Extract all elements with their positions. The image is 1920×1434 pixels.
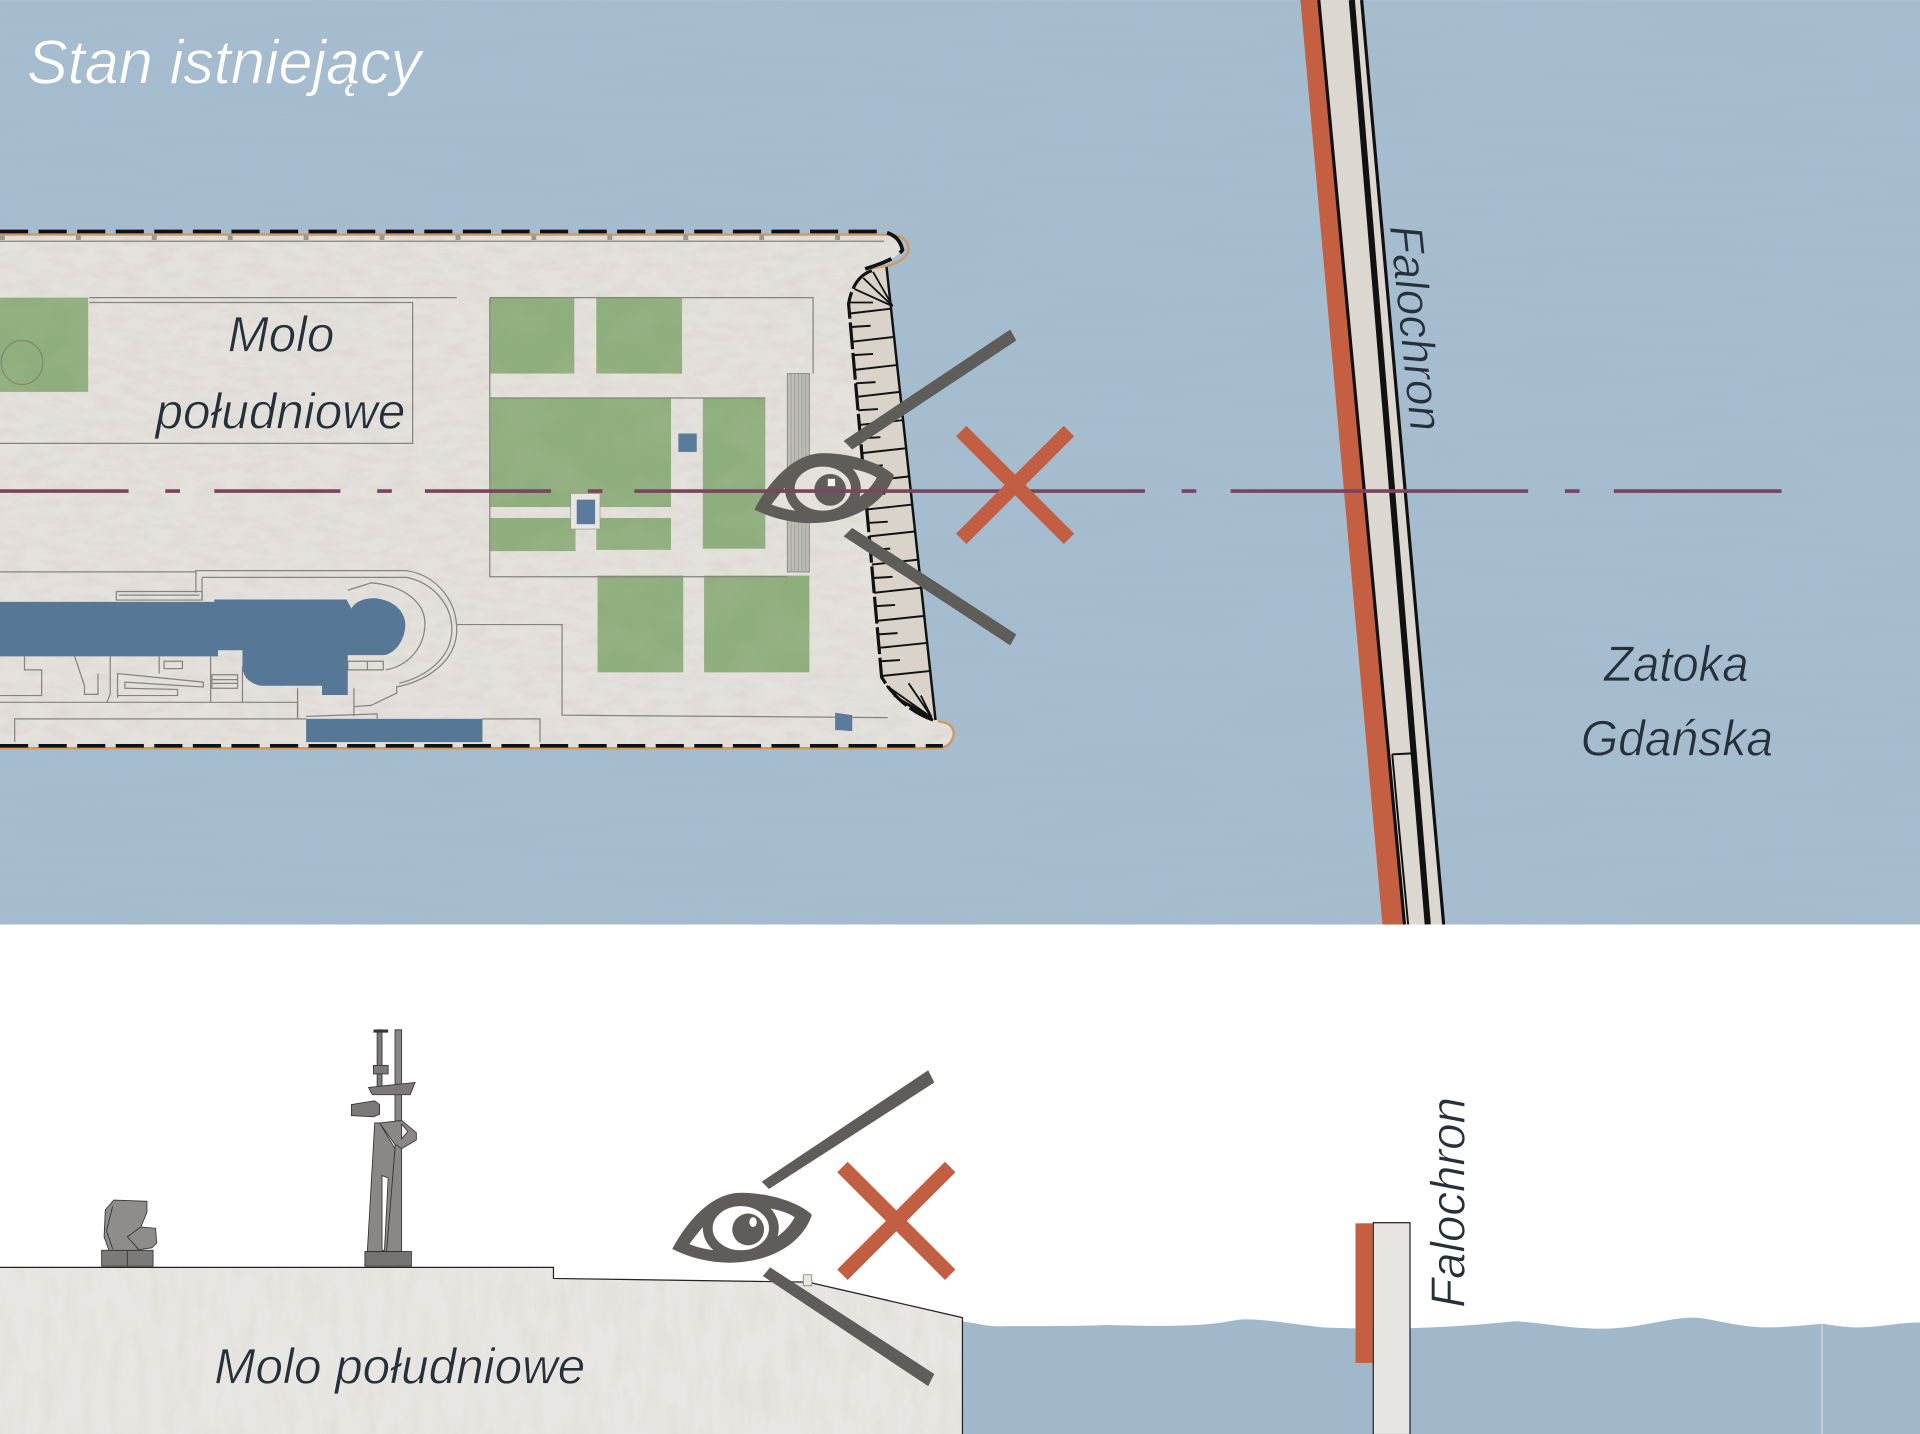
south pier in plan [0,231,967,753]
label: Zatoka Gdańska: Gdańska [1581,711,1773,767]
label: Molo południowe in plan [154,306,405,440]
pier slab [0,233,967,753]
red cross, section [842,1167,950,1275]
dash-dot section line [0,490,1782,493]
label: Falochron in plan: Falochron [1380,222,1452,433]
rip-rap slope at pier head [849,267,936,720]
label: Molo południowe in section: Molo południowe [214,1339,585,1395]
label: Molo południowe in plan: Molo [228,306,334,362]
small sculpture on pier [102,1200,157,1266]
label: Falochron in section: Falochron [1422,1097,1475,1308]
small blue squares [571,434,852,731]
label: Molo południowe in plan: południowe [154,384,405,440]
blue pool and basin [0,598,482,742]
label: Zatoka Gdańska [1581,636,1773,767]
breakwater in section [1356,1223,1410,1434]
panel: plan view of existing state [0,0,1920,925]
sea background, Gulf of Gdańsk [0,0,1920,925]
thin plan linework [0,241,888,742]
sight line upper, plan [844,329,1016,449]
red cross, plan [961,431,1069,539]
monument on pier [351,1030,416,1266]
sight line lower, section [763,1267,934,1386]
sight line upper, section [762,1070,934,1189]
south pier in section [0,1261,967,1434]
dashed pier edge [0,231,943,746]
label: Zatoka Gdańska: Zatoka [1603,636,1749,692]
panel: cross-section of existing state [0,925,1920,1434]
gray terrace strip [787,374,809,572]
eye icon in plan [754,453,894,523]
title: Stan istniejący [27,27,425,97]
eye icon in section [672,1193,812,1263]
water in section [962,1318,1920,1434]
sight line lower, plan [844,528,1016,645]
green lawns [0,294,820,676]
white sky background [0,925,1920,1434]
breakwater in plan [1300,0,1444,925]
